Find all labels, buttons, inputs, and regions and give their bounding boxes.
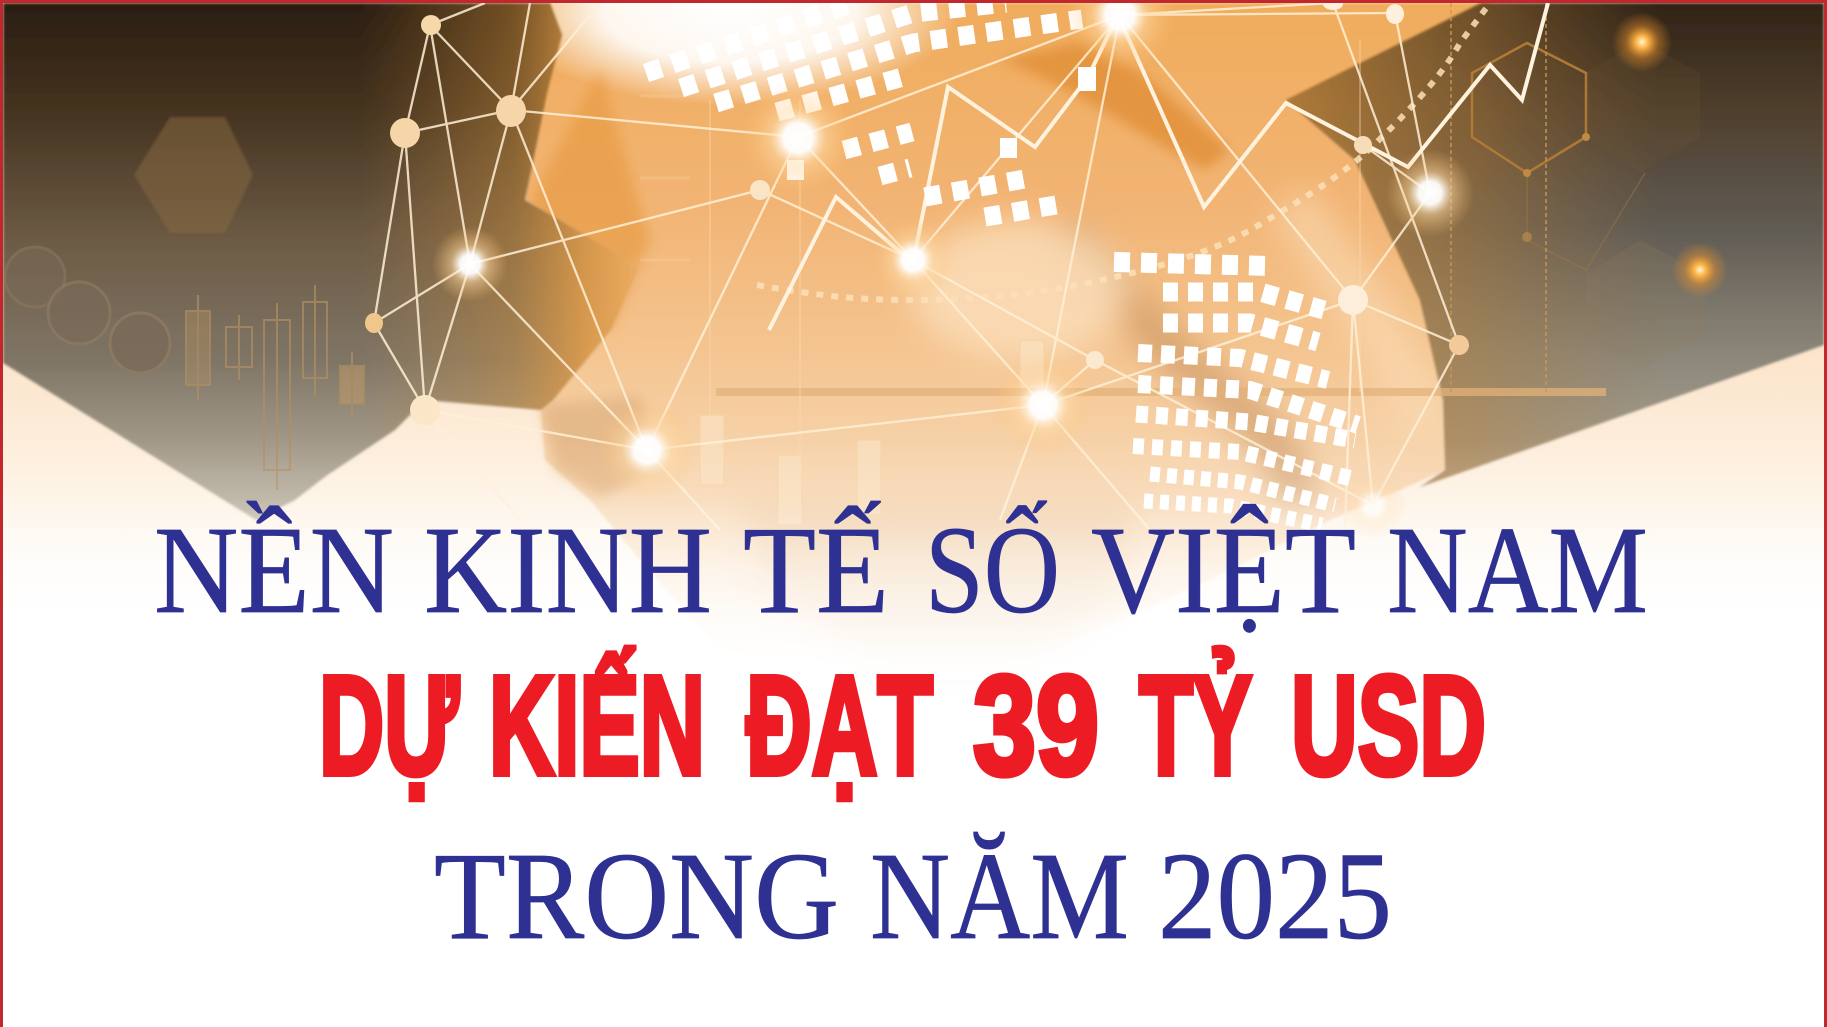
title line 1: [154, 500, 1648, 640]
hexagon decorations: [134, 40, 1705, 370]
network nodes: [365, 0, 1469, 425]
candlestick chart, centre: [700, 340, 1044, 525]
title line 3: [434, 828, 1392, 966]
title line 3: 2025: [1158, 828, 1392, 966]
dotted world map, lower globe: [1114, 262, 1358, 525]
left suit sleeve: [3, 3, 640, 520]
glowing network nodes: [432, 0, 1474, 539]
title: [154, 500, 1648, 966]
title line 2: USD: [1291, 646, 1486, 804]
title line 2: [319, 646, 1486, 804]
title line 3: TRONG: [434, 828, 839, 966]
title line 1: TẾ: [743, 501, 889, 640]
title line 3: NĂM: [870, 828, 1129, 966]
chart axis and vertical guides: [640, 3, 1606, 500]
network lines: [374, 3, 1459, 530]
clasped hands silhouette: [500, 0, 1490, 680]
dotted arc: [757, 7, 1487, 300]
hero image: handshake over digital network: [0, 0, 1827, 680]
title line 2: TỶ: [1139, 646, 1252, 804]
title line 1: KINH: [424, 502, 712, 640]
title line 2: KIẾN: [489, 646, 705, 804]
title line 1: SỐ: [925, 500, 1060, 640]
orange sparks: [1612, 12, 1728, 298]
candlestick chart, left: [186, 285, 364, 490]
title line 2: 39: [973, 646, 1099, 804]
title line 1: NỀN: [154, 501, 394, 640]
right suit sleeve: [1286, 3, 1824, 487]
jacket buttons: [5, 247, 170, 373]
rising zigzag line chart: [769, 3, 1548, 330]
title line 1: VIỆT: [1091, 502, 1356, 640]
dotted world map, upper globe: [646, 3, 1096, 217]
bottom white fade: [0, 440, 1827, 680]
title line 2: DỰ: [319, 646, 459, 804]
title line 2: ĐẠT: [746, 646, 933, 804]
title line 1: NAM: [1387, 502, 1648, 640]
